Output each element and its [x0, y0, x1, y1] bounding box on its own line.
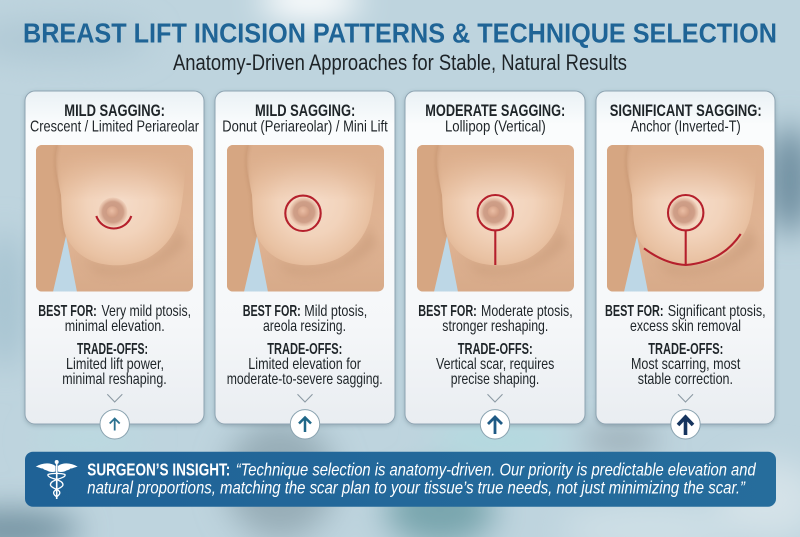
chevron [678, 394, 693, 402]
heading: lollipop: MODERATE SAGGING: [425, 101, 565, 120]
trade-offs: donut: TRADE-OFFS: [267, 341, 342, 358]
subheading: anchor: Anchor (Inverted-T) [631, 118, 741, 136]
best for: anchor: Significant ptosis, [668, 303, 766, 320]
best for: donut: Mild ptosis, [304, 303, 367, 320]
badge: largest arrow [671, 410, 700, 439]
panel: crescent [25, 91, 204, 439]
trade-offs: donut [227, 341, 383, 388]
trade-offs: crescent: minimal reshaping. [62, 371, 167, 388]
chevron [298, 394, 312, 402]
panel: donut [215, 91, 395, 439]
panel: lollipop [405, 91, 585, 439]
illustration: lollipop incision [417, 145, 574, 292]
trade-offs: crescent [62, 341, 167, 388]
best for: donut: BEST FOR: [243, 303, 301, 320]
best for: donut: areola resizing. [263, 318, 346, 335]
illustration: donut incision [227, 145, 384, 292]
trade-offs: donut: moderate-to-severe sagging. [227, 371, 383, 388]
trade-offs: anchor: Most scarring, most [631, 356, 741, 373]
trade-offs: lollipop [436, 341, 554, 388]
heading: crescent: MILD SAGGING: [64, 101, 165, 120]
chevron [488, 394, 502, 402]
best for: lollipop: BEST FOR: [418, 303, 477, 320]
best for: anchor: BEST FOR: [605, 303, 664, 320]
panel: anchor [596, 91, 775, 439]
best for: lollipop [418, 303, 573, 335]
best for: lollipop: stronger reshaping. [442, 318, 548, 335]
subheading: crescent: Crescent / Limited Periareolar [30, 118, 200, 136]
best for: anchor: excess skin removal [630, 318, 741, 335]
subtitle: Anatomy-Driven Approaches for Stable, Natural Results [173, 50, 627, 75]
badge: large arrow [480, 410, 510, 439]
best for: lollipop: Moderate ptosis, [481, 303, 573, 320]
badge: medium arrow [290, 410, 320, 439]
best for: crescent [38, 303, 191, 335]
illustration: crescent incision [36, 145, 193, 292]
best for: crescent: Very mild ptosis, [102, 303, 191, 320]
subheading: donut: Donut (Periareolar) / Mini Lift [222, 118, 388, 136]
insight text [87, 460, 757, 497]
illustration: anchor incision [607, 145, 764, 292]
best for: anchor [605, 303, 766, 335]
trade-offs: donut: Limited elevation for [248, 356, 362, 373]
trade-offs: anchor: TRADE-OFFS: [648, 341, 723, 358]
best for: crescent: minimal elevation. [65, 318, 165, 335]
insight text: SURGEON’S INSIGHT: [87, 460, 230, 480]
trade-offs: anchor: stable correction. [638, 371, 733, 388]
best for: crescent: BEST FOR: [38, 303, 97, 320]
trade-offs: crescent: Limited lift power, [66, 356, 164, 373]
trade-offs: lollipop: Vertical scar, requires [436, 356, 554, 373]
badge: small arrow [100, 410, 129, 439]
trade-offs: lollipop: TRADE-OFFS: [458, 341, 533, 358]
trade-offs: lollipop: precise shaping. [451, 371, 539, 388]
chevron [107, 394, 122, 402]
subheading: lollipop: Lollipop (Vertical) [445, 118, 546, 136]
icon: caduceus [36, 460, 78, 499]
callout: surgeon's insight [25, 452, 776, 507]
heading: donut: MILD SAGGING: [255, 101, 355, 120]
best for: donut [243, 303, 367, 335]
trade-offs: crescent: TRADE-OFFS: [77, 341, 148, 358]
trade-offs: anchor [631, 341, 741, 388]
